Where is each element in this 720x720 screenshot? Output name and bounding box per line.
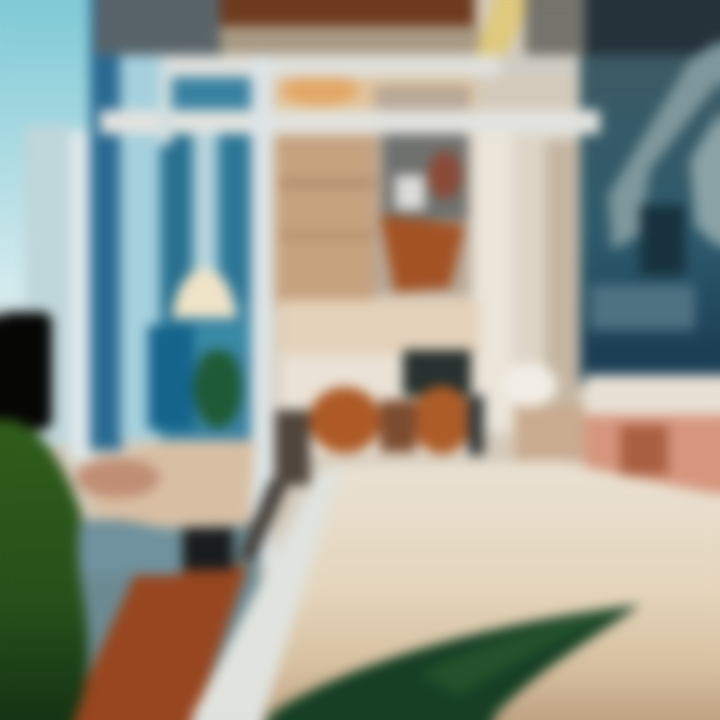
green leaf in foreground: [262, 605, 640, 720]
pendant lamp: [172, 130, 237, 318]
right side: dark teal wall with pale streaks: [580, 40, 720, 355]
green foliage: [0, 420, 88, 720]
lower centre: shelf and seating: [275, 300, 484, 485]
side table and hand: [76, 440, 255, 528]
white column right of centre: [470, 125, 580, 435]
foreground: person silhouette and plant on left: [0, 312, 88, 720]
central wood panel: [275, 74, 475, 305]
dark divider behind bed: [238, 480, 290, 560]
ceiling: [95, 0, 720, 65]
floor: [68, 520, 260, 720]
white window frame: [100, 55, 600, 565]
wall artwork: [375, 85, 470, 295]
dark head silhouette: [0, 312, 52, 430]
potted plant by window: [148, 325, 250, 430]
right side: sofa with cushions: [503, 340, 720, 493]
window: sky and skyline on the left: [0, 0, 255, 460]
bed with cream linen: [190, 462, 720, 720]
